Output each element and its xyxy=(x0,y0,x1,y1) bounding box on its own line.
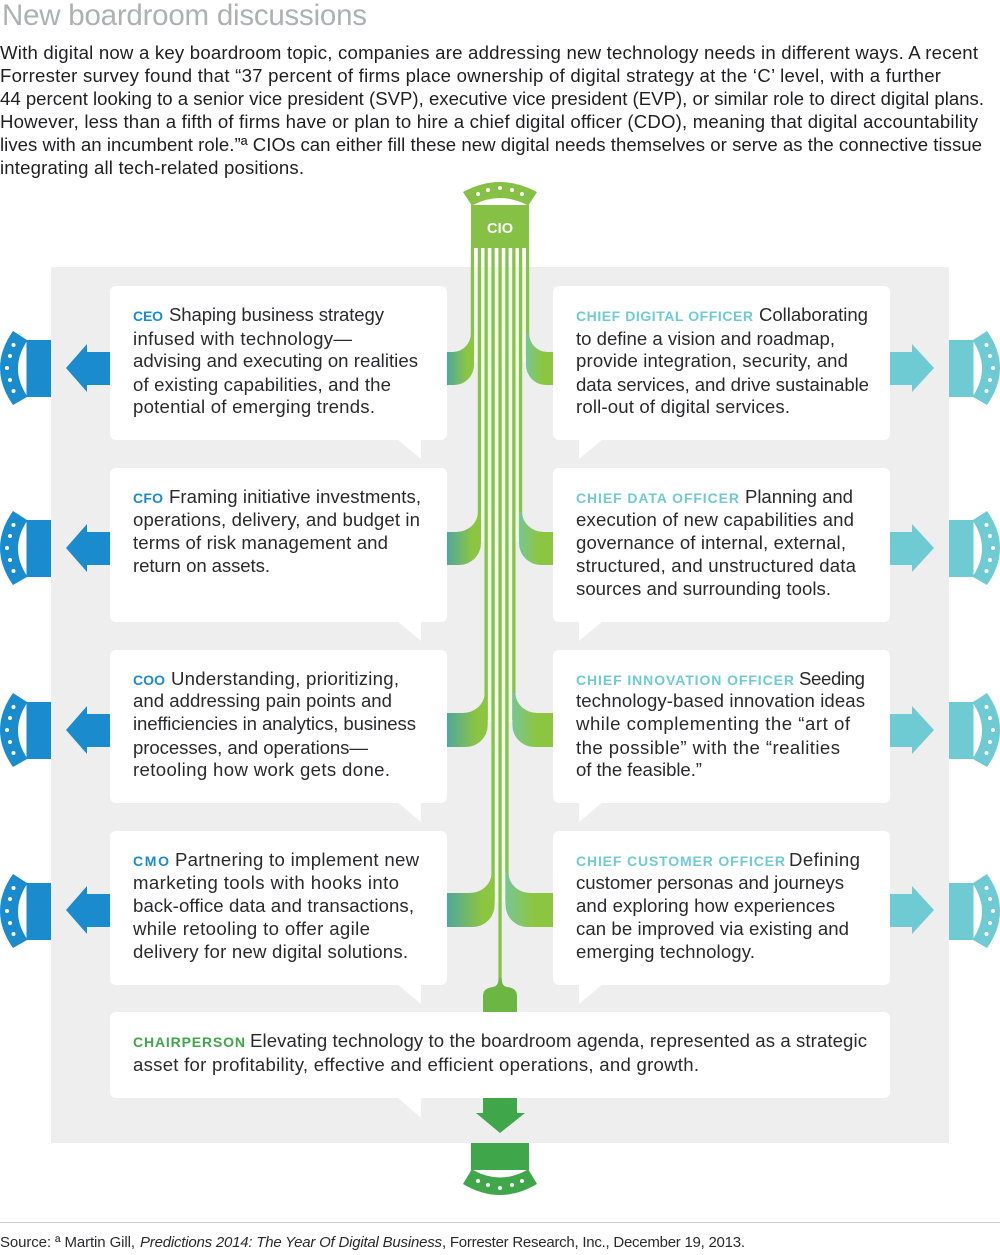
card: CFO: CFO xyxy=(133,490,163,506)
card: chief customer officer: Defining xyxy=(789,849,860,870)
card: CFO: return on assets. xyxy=(133,555,270,576)
intro paragraph: Forrester survey found that “37 percent of firms place ownership of digital strategy at the ‘C’ level, with a further xyxy=(0,65,941,86)
card: CMO: delivery for new digital solutions. xyxy=(133,941,408,962)
card: chief data officer: governance of internal, external, xyxy=(576,532,846,553)
card: COO: processes, and operations— xyxy=(133,737,368,758)
card: chief innovation officer: technology-based innovation ideas xyxy=(576,690,865,711)
arrow: chief data officer xyxy=(890,524,934,572)
source footnote: Predictions 2014: The Year Of Digital Business xyxy=(140,1234,442,1251)
card: chief digital officer xyxy=(553,286,890,459)
card: CFO: operations, delivery, and budget in xyxy=(133,509,420,530)
card: CMO: marketing tools with hooks into xyxy=(133,872,399,893)
icon: chief innovation officer pillar xyxy=(949,693,1000,767)
icon: CIO pillar head: CIO xyxy=(487,221,513,237)
card: chief data officer: execution of new capabilities and xyxy=(576,509,854,530)
card: chief customer officer: customer personas and journeys xyxy=(576,872,844,893)
intro paragraph: integrating all tech-related positions. xyxy=(0,157,304,178)
source footnote: , Forrester Research, Inc., December 19, 2013. xyxy=(442,1234,745,1251)
icon: chief digital officer pillar xyxy=(949,331,1000,405)
card: CFO: Framing initiative investments, xyxy=(169,486,421,507)
intro paragraph xyxy=(0,42,984,178)
icon: CFO pillar xyxy=(0,511,51,585)
icon: COO pillar xyxy=(0,693,51,767)
card: COO xyxy=(110,650,447,822)
source footnote: Source: ª Martin Gill, xyxy=(0,1234,135,1251)
arrow: CMO xyxy=(66,886,110,934)
card: CEO: Shaping business strategy xyxy=(169,304,385,325)
icon: CMO pillar xyxy=(0,874,51,948)
card: CMO: CMO xyxy=(133,853,169,869)
card: COO: COO xyxy=(133,672,165,688)
card: chief digital officer: data services, and drive sustainable xyxy=(576,374,869,395)
card: CMO: back-office data and transactions, xyxy=(133,895,414,916)
arrow: chief innovation officer xyxy=(890,706,934,754)
card: CEO: potential of emerging trends. xyxy=(133,396,375,417)
card: chief innovation officer: CHIEF INNOVATION OFFICER xyxy=(576,672,794,688)
card: chief data officer xyxy=(553,468,890,641)
icon: CEO pillar xyxy=(0,331,51,405)
card: chief innovation officer xyxy=(553,650,890,822)
card: chairperson: asset for profitability, effective and efficient operations, and growth. xyxy=(133,1054,699,1075)
card: chief digital officer: CHIEF DIGITAL OFFICER xyxy=(576,308,753,324)
arrow: chairperson xyxy=(476,1098,525,1133)
card: chief data officer: CHIEF DATA OFFICER xyxy=(576,490,739,506)
card: chief customer officer xyxy=(553,831,890,1004)
icon: chief customer officer pillar xyxy=(949,874,1000,948)
card: CEO: of existing capabilities, and the xyxy=(133,374,391,395)
card: chief digital officer: provide integration, security, and xyxy=(576,350,848,371)
card: chief innovation officer: while complementing the “art of xyxy=(575,713,851,734)
card: CEO: CEO xyxy=(133,308,163,324)
card: CMO: while retooling to offer agile xyxy=(132,918,370,939)
card: chief digital officer: roll-out of digital services. xyxy=(576,396,790,417)
arrow: COO xyxy=(66,706,110,754)
card: chief customer officer: emerging technology. xyxy=(576,941,755,962)
card: chief innovation officer: of the feasible.” xyxy=(576,759,702,780)
card: chairperson: Elevating technology to the boardroom agenda, represented as a strategic xyxy=(250,1030,867,1051)
card: chief data officer: Planning and xyxy=(745,486,853,507)
arrow: CEO xyxy=(66,344,110,392)
icon: CIO pillar head xyxy=(463,182,537,248)
card: COO: retooling how work gets done. xyxy=(133,759,390,780)
card: chief customer officer: CHIEF CUSTOMER OFFICER xyxy=(576,853,785,869)
card: chief customer officer: and exploring how experiences xyxy=(576,895,835,916)
card: CEO: infused with technology— xyxy=(133,328,352,349)
card: chief digital officer: Collaborating xyxy=(759,304,868,325)
source footnote xyxy=(0,1234,745,1251)
intro paragraph: 44 percent looking to a senior vice president (SVP), executive vice president (EVP), or similar role to direct digital plans. xyxy=(0,88,984,109)
intro paragraph: With digital now a key boardroom topic, companies are addressing new technology needs in different ways. A recent xyxy=(0,42,979,63)
card: CEO: advising and executing on realities xyxy=(133,350,418,371)
card: chief data officer: sources and surrounding tools. xyxy=(576,578,831,599)
card: CEO xyxy=(110,286,447,459)
card: chief customer officer: can be improved via existing and xyxy=(576,918,849,939)
connector bulb to chairperson xyxy=(483,978,517,1012)
card: chief innovation officer: the possible” with the “realities xyxy=(576,737,840,758)
card: chief data officer: structured, and unstructured data xyxy=(576,555,857,576)
intro paragraph: lives with an incumbent role.”ª CIOs can either fill these new digital needs themselves or serve as the connective tissue xyxy=(0,134,982,155)
connector stripes from CIO xyxy=(471,248,529,988)
branches: right, to digital, data, innovation, customer officers xyxy=(506,333,553,927)
icon: chief data officer pillar xyxy=(949,511,1000,585)
arrow: chief digital officer xyxy=(890,344,934,392)
card: chief digital officer: to define a vision and roadmap, xyxy=(576,328,835,349)
card: COO: and addressing pain points and xyxy=(133,690,392,711)
card: chief innovation officer: Seeding xyxy=(799,668,865,689)
intro paragraph: However, less than a fifth of firms have or plan to hire a chief digital officer (CDO), meaning that digital accountability xyxy=(0,111,979,132)
branches: left, to CEO, CFO, COO, CMO xyxy=(447,333,495,927)
card: COO: Understanding, prioritizing, xyxy=(171,668,399,689)
card: CMO: Partnering to implement new xyxy=(175,849,420,870)
card: chairperson: CHAIRPERSON xyxy=(133,1034,245,1050)
card: chairperson xyxy=(110,1012,890,1118)
card: CFO xyxy=(110,468,447,641)
card: CMO xyxy=(110,831,447,1004)
card: COO: inefficiencies in analytics, business xyxy=(133,713,416,734)
arrow: CFO xyxy=(66,524,110,572)
arrow: chief customer officer xyxy=(890,886,934,934)
panel: grey background xyxy=(51,267,949,1143)
icon: chairperson pillar xyxy=(463,1143,537,1195)
card: CFO: terms of risk management and xyxy=(133,532,388,553)
